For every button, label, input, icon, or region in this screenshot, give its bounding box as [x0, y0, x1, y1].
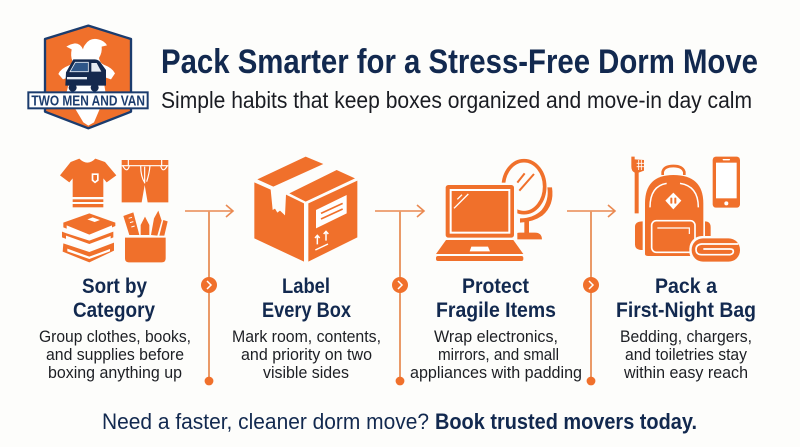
text: sort by category description	[39, 328, 191, 382]
panel: pack a first-night bag	[616, 157, 756, 382]
text: protect fragile items description: appliances with padding	[410, 364, 582, 382]
text: label every box description: Mark room, contents,	[232, 328, 381, 346]
heading: pack a first-night bag: First-Night Bag	[616, 298, 756, 322]
text: pack a first-night bag description: within easy reach	[623, 364, 748, 382]
text: pack a first-night bag description	[620, 328, 752, 382]
call to action footer: Need a faster, cleaner dorm move?	[102, 409, 429, 434]
heading: pack a first-night bag	[616, 274, 756, 322]
icon: labelled cardboard box	[254, 157, 357, 262]
heading: sort by category	[73, 274, 155, 322]
text: pack a first-night bag description: and toiletries stay	[625, 346, 748, 364]
text: label every box description: and priority on two	[241, 346, 372, 364]
text: protect fragile items description: Wrap electronics,	[434, 328, 558, 346]
heading: protect fragile items	[436, 274, 556, 322]
text: protect fragile items description	[410, 328, 582, 382]
text: protect fragile items description: mirrors, and small	[438, 346, 559, 364]
text: pack a first-night bag description: Bedding, chargers,	[620, 328, 752, 346]
icon: backpack, toothbrush, phone and towel	[631, 157, 742, 264]
icon: laptop and mirror	[436, 161, 552, 261]
heading: protect fragile items: Protect	[462, 274, 529, 298]
text: label every box description	[232, 328, 381, 382]
heading: label every box: Every Box	[262, 298, 351, 322]
panel: label every box	[232, 157, 381, 382]
text: label every box description: visible sides	[263, 364, 349, 382]
heading: label every box: Label	[282, 274, 330, 298]
panel: protect fragile items	[410, 161, 582, 382]
heading: label every box	[262, 274, 351, 322]
icon: clothes, books and supplies	[60, 159, 168, 262]
arrow: connector 2	[375, 205, 424, 385]
heading: sort by category: Category	[73, 298, 155, 322]
heading: sort by category: Sort by	[82, 274, 147, 298]
text: sort by category description: Group clothes, books,	[39, 328, 191, 346]
text: sort by category description: boxing anything up	[48, 364, 182, 382]
arrow: connector 1	[185, 205, 233, 385]
heading: protect fragile items: Fragile Items	[436, 298, 556, 322]
call to action footer	[102, 409, 697, 434]
logo: Two Men and Van badge	[28, 26, 148, 128]
heading: pack a first-night bag: Pack a	[655, 274, 718, 298]
call to action footer: Book trusted movers today.	[435, 409, 697, 434]
panel: sort by category	[39, 159, 191, 382]
text: sort by category description: and supplies before	[46, 346, 184, 364]
arrow: connector 3	[567, 205, 615, 385]
logo: Two Men and Van badge: TWO MEN AND VAN	[31, 94, 145, 110]
